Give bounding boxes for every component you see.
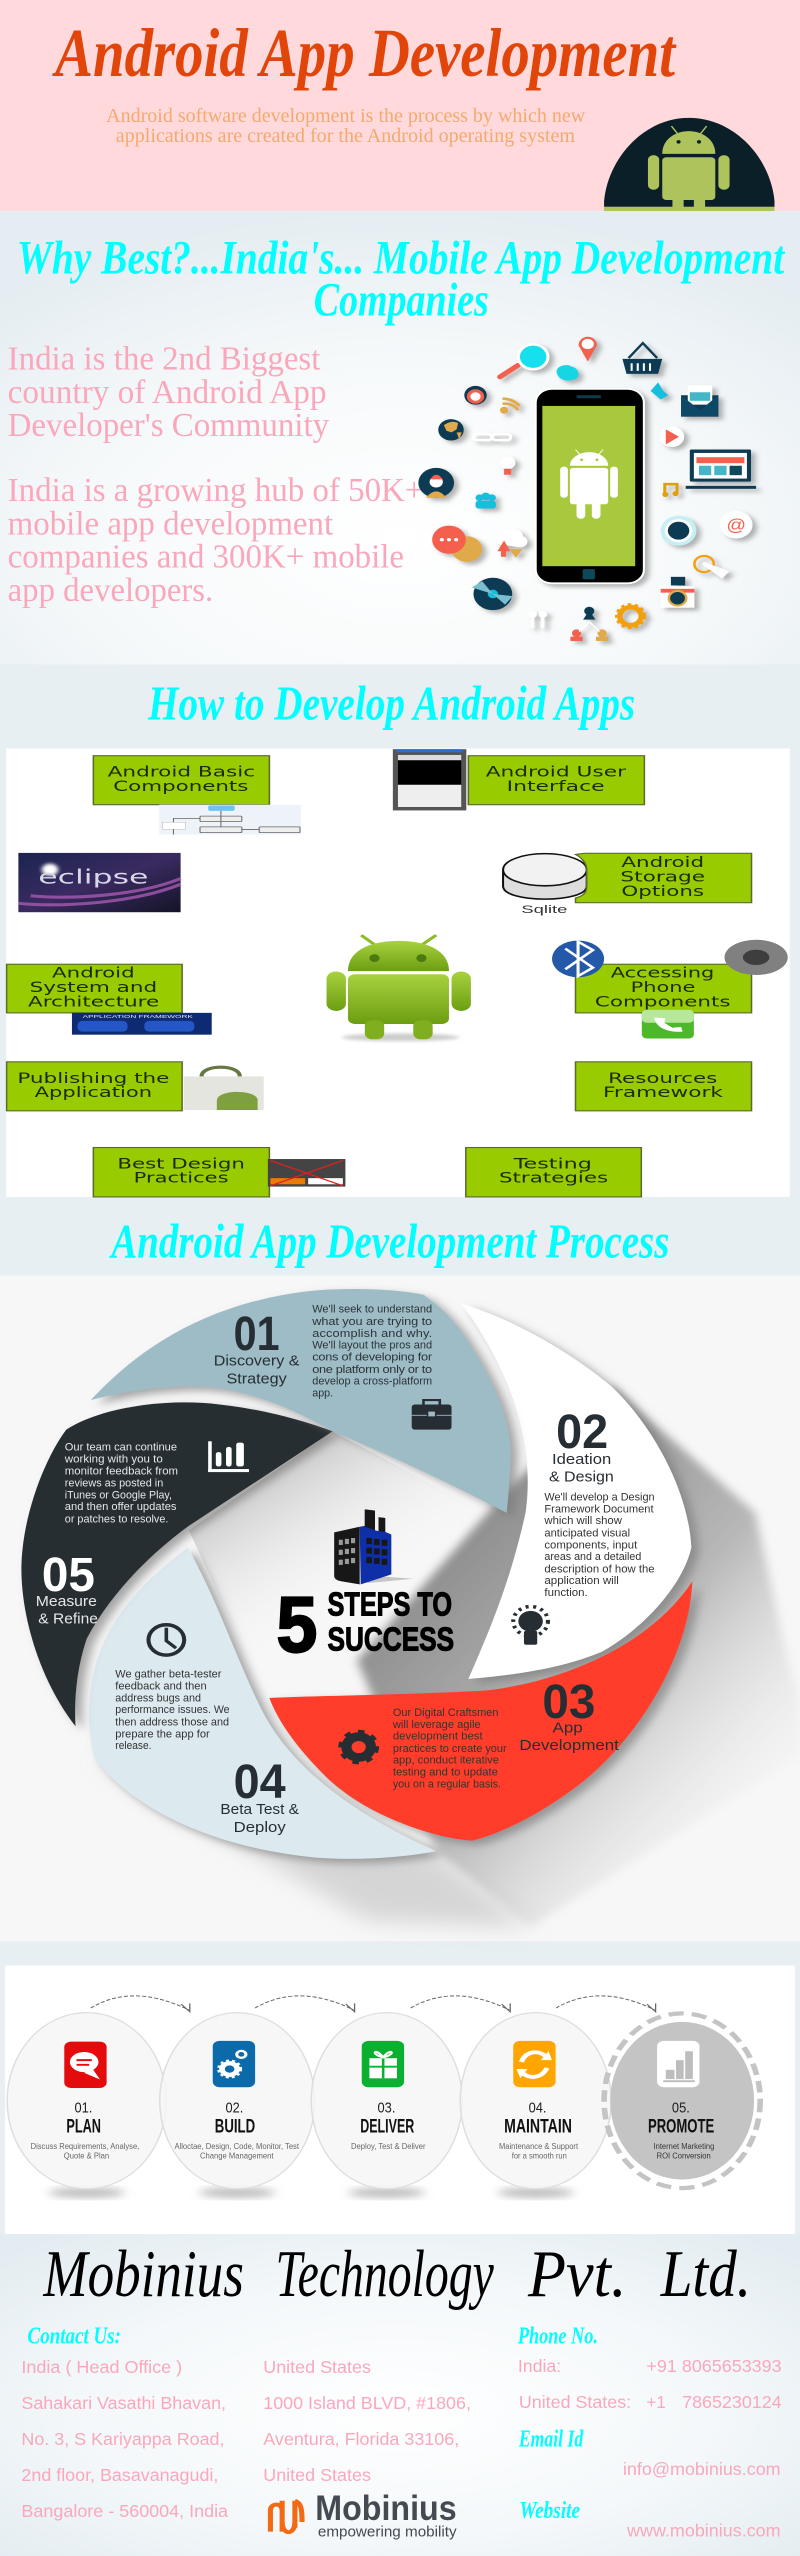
- topic: android user interface: Interface: [507, 778, 605, 795]
- heading: 5 steps to success: SUCCESS: [328, 1620, 454, 1658]
- step 02: build: 02.: [226, 2099, 243, 2116]
- heading: company name: [43, 2237, 751, 2310]
- topic: android system and architecture: System and: [30, 979, 157, 996]
- segment 02: ideation and design: components, input: [544, 1538, 638, 1551]
- segment 02: ideation and design: [462, 1304, 691, 1679]
- topic: android user interface: Android User: [486, 764, 627, 781]
- segment 04: beta test and deploy: We gather beta-tester: [115, 1668, 221, 1680]
- segment 02: ideation and design: function.: [544, 1586, 588, 1599]
- image: application framework: APPLICATION FRAMEWORK: [83, 1014, 193, 1020]
- segment 04: beta test and deploy: performance issues. We: [115, 1703, 230, 1716]
- image: phone screen: [393, 749, 466, 810]
- step 01: plan: [7, 2013, 166, 2189]
- topic: accessing phone components: Components: [595, 994, 731, 1011]
- topic: resources framework: Resources: [608, 1070, 717, 1087]
- segment 01: discovery and strategy: app.: [312, 1387, 333, 1399]
- text block: contact india: 2nd floor, Basavanagudi,: [21, 2466, 218, 2485]
- text block: phone numbers: United States:: [519, 2393, 631, 2412]
- topic: publishing the application: [7, 1062, 182, 1111]
- topic: testing strategies: Testing: [512, 1156, 592, 1173]
- text block: growing hub: [8, 471, 423, 608]
- step 02: build: [160, 2013, 315, 2189]
- text block: contact india: Sahakari Vasathi Bhavan,: [21, 2394, 226, 2413]
- segment 03: app development: you on a regular basis.: [393, 1777, 501, 1790]
- topic: accessing phone components: [576, 964, 752, 1013]
- segment 04: beta test and deploy: Beta Test &: [220, 1801, 299, 1817]
- text block: growing hub: app developers.: [8, 571, 213, 608]
- step 01: plan: Quote & Plan: [64, 2152, 109, 2161]
- text block: phone numbers: Phone No.: [517, 2323, 598, 2349]
- segment 05: measure and refine: iTunes or Google Play,: [65, 1488, 172, 1501]
- text block: contact united states: 1000 Island BLVD, #1806,: [263, 2394, 471, 2413]
- text block: phone numbers: +1: [646, 2393, 666, 2412]
- step 04: maintain: 04.: [529, 2099, 546, 2116]
- topic: android basic components: Android Basic: [108, 764, 255, 781]
- header background: [0, 0, 800, 211]
- text block: india community: India is the 2nd Biggest: [8, 340, 320, 377]
- text block: contact united states: Aventura, Florida 33106,: [263, 2430, 459, 2449]
- topic: android system and architecture: [7, 964, 182, 1013]
- long shadows: [94, 1387, 800, 1927]
- topic: android storage options: [576, 853, 752, 903]
- image: application framework: [72, 1013, 212, 1035]
- segment 04: beta test and deploy: release.: [115, 1739, 152, 1752]
- panel: android topics diagram: [6, 748, 790, 1197]
- segment 03: app development: App: [553, 1720, 583, 1736]
- topic: resources framework: [576, 1062, 752, 1111]
- illustration: phone with app icons: [418, 337, 756, 641]
- text block: contact india: Bangalore - 560004, India: [21, 2502, 228, 2521]
- text block: india community: [8, 340, 330, 443]
- subtitle: Android software development is the process by which new: [106, 105, 586, 126]
- step 03: deliver: DELIVER: [360, 2115, 414, 2137]
- panel: plan build deliver maintain promote: [5, 1965, 795, 2234]
- heading: company name: Mobinius: [43, 2237, 244, 2310]
- topic: testing strategies: [466, 1148, 641, 1197]
- segment 02: ideation and design: areas and a detailed: [544, 1550, 641, 1563]
- icon: android market bag: [184, 1067, 264, 1110]
- topic: best design practices: [93, 1148, 269, 1197]
- section: lifecycle and footer: [0, 1965, 800, 2556]
- segment 05: measure and refine: reviews as posted in: [65, 1476, 163, 1489]
- step 05: promote: ROI Conversion: [657, 2152, 711, 2161]
- text block: contact united states: United States: [263, 2358, 371, 2377]
- icon: clock: [148, 1625, 184, 1655]
- topic: accessing phone components: Phone: [631, 979, 695, 996]
- logo: mobinius: empowering mobility: [318, 2523, 457, 2540]
- heading: 5 steps to success: 5: [277, 1581, 317, 1669]
- text block: contact united states: [263, 2358, 471, 2485]
- image: eclipse logo: eclipse: [38, 867, 148, 889]
- step 04: maintain: Maintenance & Support: [499, 2142, 578, 2152]
- step 03: deliver: Deploy, Test & Deliver: [351, 2142, 426, 2152]
- image: flow diagram: [159, 805, 301, 835]
- topic: android system and architecture: Architecture: [28, 994, 159, 1011]
- subtitle: applications are created for the Android operating system: [116, 125, 575, 146]
- heading: company name: Pvt.: [527, 2237, 627, 2310]
- text block: india community: Developer's Community: [8, 406, 330, 443]
- segment 05: measure and refine: working with you to: [64, 1452, 163, 1465]
- step 02: build: Alloctae, Design, Code, Monitor, Test: [174, 2142, 299, 2152]
- segment 01: discovery and strategy: We'll seek to understand: [312, 1302, 432, 1315]
- segment 01: discovery and strategy: what you are trying to: [311, 1315, 433, 1328]
- segment 01: discovery and strategy: Strategy: [227, 1371, 287, 1387]
- segment 03: app development: practices to create your: [393, 1742, 507, 1755]
- step 01: plan: 01.: [74, 2099, 92, 2116]
- segment 05: measure and refine: Our team can continue: [65, 1440, 177, 1453]
- text block: contact united states: United States: [263, 2466, 371, 2485]
- text block: growing hub: companies and 300K+ mobile: [8, 537, 404, 575]
- topic: publishing the application: Publishing the: [17, 1070, 169, 1087]
- heading: company name: Technology: [276, 2237, 494, 2310]
- step shadows: [48, 2188, 574, 2197]
- topic: android system and architecture: Android: [52, 965, 135, 982]
- image: crossed out dialog: [268, 1159, 345, 1187]
- step 01: plan: Discuss Requirements, Analyse,: [31, 2142, 139, 2152]
- segment 03: app development: development best: [393, 1730, 483, 1742]
- segment 04: beta test and deploy: Deploy: [234, 1819, 286, 1836]
- illustration: phone with app icons: @: [726, 516, 746, 534]
- segment 02: ideation and design: & Design: [549, 1469, 614, 1485]
- icon: building: [334, 1509, 413, 1584]
- segment 05: measure and refine: [21, 1402, 333, 1726]
- segment 02: ideation and design: which will show: [543, 1514, 622, 1527]
- icon: android badge: [604, 118, 774, 211]
- panel background: why best: [0, 211, 800, 664]
- heading: why best: Companies: [314, 274, 489, 326]
- text block: phone numbers: India:: [518, 2357, 561, 2376]
- step 03: deliver: 03.: [378, 2099, 395, 2116]
- step 02: build: Change Management: [200, 2152, 274, 2161]
- segment 04: beta test and deploy: 04: [234, 1755, 286, 1809]
- text block: contact india: [21, 2323, 228, 2521]
- topic: android storage options: Storage: [620, 869, 705, 886]
- heading: 5 steps to success: [277, 1581, 454, 1669]
- topic: best design practices: Practices: [134, 1170, 229, 1187]
- text block: contact india: Contact Us:: [28, 2323, 121, 2349]
- segment 03: app development: will leverage agile: [392, 1718, 481, 1731]
- step 05: promote: [604, 2013, 760, 2188]
- segment 02: ideation and design: Framework Document: [544, 1502, 654, 1515]
- segment 04: beta test and deploy: feedback and then: [115, 1679, 207, 1692]
- icon: phone call: [642, 1010, 694, 1038]
- text block: email: [518, 2426, 781, 2479]
- topic: android basic components: [93, 756, 269, 805]
- topic: android user interface: [468, 756, 644, 805]
- topic: accessing phone components: Accessing: [611, 965, 714, 982]
- segment 05: measure and refine: & Refine: [38, 1611, 98, 1627]
- segment 02: ideation and design: Ideation: [552, 1451, 611, 1468]
- segment 04: beta test and deploy: address bugs and: [115, 1691, 201, 1704]
- segment 02: ideation and design: anticipated visual: [544, 1526, 630, 1539]
- segment 03: app development: 03: [542, 1675, 595, 1729]
- step 05: promote: PROMOTE: [648, 2115, 714, 2137]
- chart: five steps wheel: [0, 1276, 800, 1941]
- arrows between steps: [91, 1996, 656, 2012]
- panel background: footer: [0, 2234, 800, 2556]
- segment 01: discovery and strategy: We'll layout the pros and: [312, 1338, 432, 1351]
- step 04: maintain: [460, 2013, 611, 2189]
- topic: best design practices: Best Design: [117, 1156, 245, 1173]
- icon: light bulb: [513, 1607, 548, 1645]
- heading: 5 steps to success: STEPS TO: [328, 1585, 452, 1623]
- topic: android storage options: Options: [621, 883, 704, 900]
- center wedge shading: [189, 1431, 510, 1699]
- icon: briefcase: [412, 1400, 452, 1430]
- segment 05: measure and refine: and then offer updates: [65, 1500, 177, 1513]
- topic: android storage options: Android: [621, 854, 704, 871]
- segment 05: measure and refine: 05: [42, 1548, 95, 1602]
- segment 05: measure and refine: Measure: [36, 1593, 97, 1610]
- icon: bluetooth: [552, 941, 604, 977]
- segment 02: ideation and design: application will: [544, 1574, 619, 1587]
- step 04: maintain: MAINTAIN: [504, 2115, 572, 2137]
- text block: contact india: No. 3, S Kariyappa Road,: [21, 2430, 224, 2449]
- image: eclipse logo: [18, 853, 181, 912]
- segment 04: beta test and deploy: then address those and: [115, 1715, 229, 1728]
- topic: android basic components: Components: [113, 778, 249, 795]
- segment 01: discovery and strategy: one platform only or to: [312, 1363, 433, 1376]
- text block: growing hub: mobile app development: [8, 505, 333, 542]
- segment 05: measure and refine: monitor feedback from: [65, 1465, 178, 1477]
- section: header and why best: [0, 0, 800, 664]
- icon: gear: [340, 1731, 377, 1763]
- segment 03: app development: app, conduct iterative: [393, 1753, 499, 1766]
- heading: company name: Ltd.: [660, 2237, 751, 2310]
- segment 02: ideation and design: 02: [556, 1405, 608, 1459]
- icon: camera lens: [724, 940, 788, 975]
- step 05: promote: Internet Marketing: [654, 2142, 714, 2152]
- text block: website: Website: [519, 2498, 580, 2524]
- step 02: build: BUILD: [215, 2115, 255, 2137]
- topic: publishing the application: Application: [35, 1084, 152, 1101]
- section: how to develop: [6, 677, 790, 1268]
- segment 01: discovery and strategy: accomplish and why.: [312, 1327, 432, 1340]
- step 04: maintain: for a smooth run: [512, 2152, 567, 2161]
- heading: why best: [17, 232, 785, 326]
- icon: sqlite database: [503, 854, 587, 916]
- segment 02: ideation and design: We'll develop a Design: [544, 1491, 655, 1503]
- segment 03: app development: Development: [519, 1737, 619, 1754]
- segment 01: discovery and strategy: 01: [234, 1307, 280, 1361]
- segment 03: app development: [269, 1581, 692, 1841]
- segment 05: measure and refine: or patches to resolve.: [65, 1512, 168, 1525]
- subtitle: [106, 105, 586, 146]
- segment 04: beta test and deploy: [89, 1548, 436, 1859]
- text block: growing hub: India is a growing hub of 50K+: [8, 471, 423, 508]
- segment 01: discovery and strategy: [91, 1289, 511, 1513]
- logo: mobinius: Mobinius: [315, 2488, 457, 2528]
- segment 04: beta test and deploy: prepare the app for: [115, 1727, 210, 1740]
- text block: email: Email Id: [518, 2426, 584, 2453]
- segment 02: ideation and design: description of how the: [544, 1562, 655, 1575]
- text block: phone numbers: [517, 2323, 782, 2412]
- segment 01: discovery and strategy: cons of developing for: [312, 1351, 432, 1363]
- logo: mobinius: [270, 2488, 457, 2540]
- text block: contact india: India ( Head Office ): [21, 2358, 182, 2377]
- text block: website: [519, 2498, 781, 2541]
- topic: resources framework: Framework: [603, 1084, 723, 1101]
- step 03: deliver: [311, 2013, 462, 2189]
- step 01: plan: PLAN: [66, 2115, 101, 2137]
- icon: android robot: [327, 935, 471, 1041]
- icon: sqlite database: Sqlite: [521, 903, 567, 916]
- segment 01: discovery and strategy: develop a cross-platform: [312, 1374, 432, 1387]
- topic: testing strategies: Strategies: [499, 1170, 608, 1187]
- segment 03: app development: Our Digital Craftsmen: [393, 1706, 498, 1719]
- step 05: promote: 05.: [672, 2099, 690, 2116]
- segment 01: discovery and strategy: Discovery &: [214, 1353, 300, 1369]
- icon: bar chart: [208, 1441, 249, 1472]
- segment 03: app development: testing and to update: [393, 1766, 498, 1778]
- text block: india community: country of Android App: [8, 373, 327, 410]
